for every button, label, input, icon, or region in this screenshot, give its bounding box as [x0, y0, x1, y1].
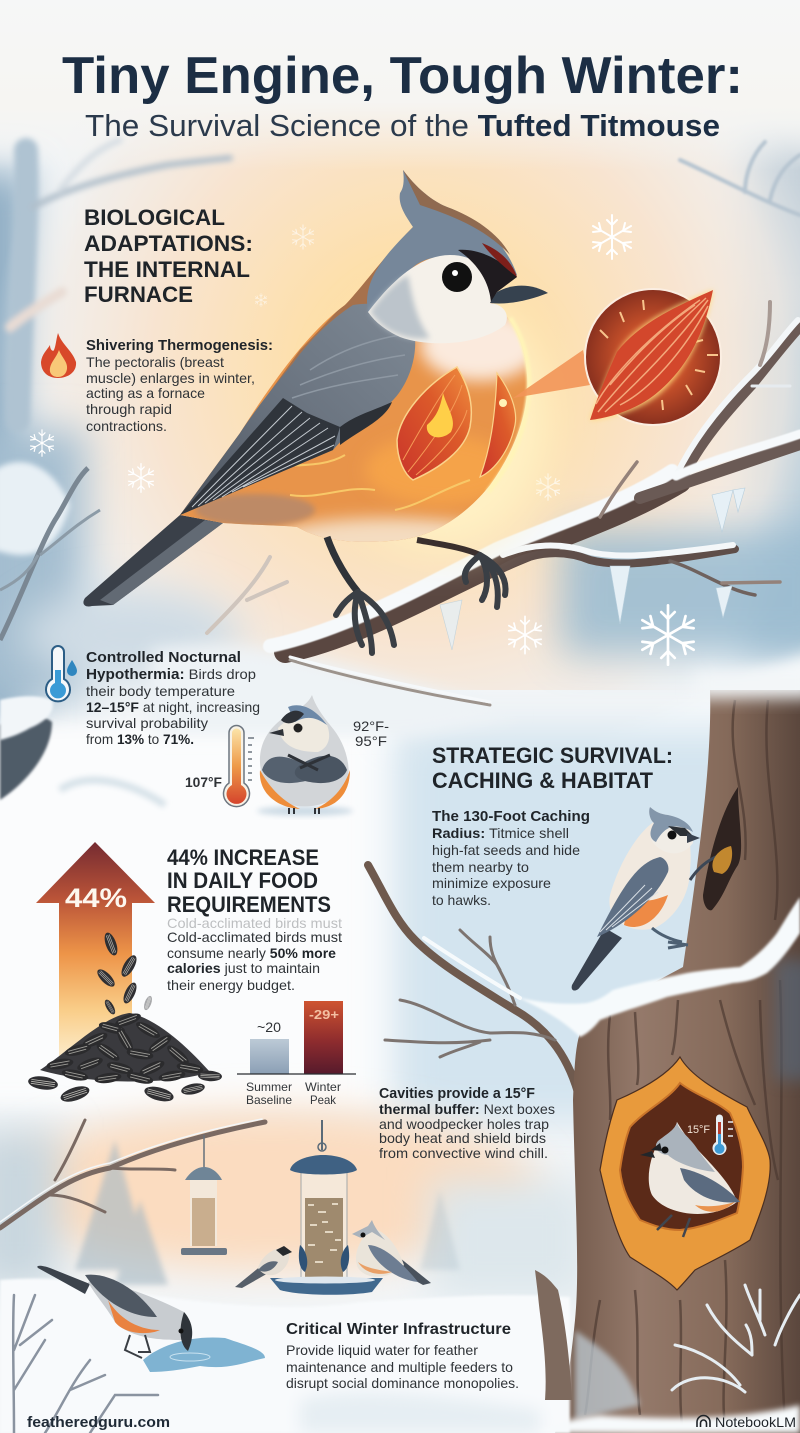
tail: [572, 928, 622, 991]
chest glow edge: [488, 318, 529, 492]
arm and seed: [690, 856, 718, 880]
heading: IN DAILY FOOD: [167, 868, 318, 893]
eye: [442, 262, 472, 292]
frost: [575, 1330, 640, 1420]
panel: biological adaptations heading: ADAPTATIONS:: [84, 231, 253, 256]
body copy: consume nearly 50% more: [167, 945, 336, 961]
body copy: their energy budget.: [167, 977, 295, 993]
snow ground: [0, 1278, 570, 1433]
hot spot: [499, 399, 507, 407]
chest muscle left: [397, 367, 471, 480]
bird glow: [330, 290, 550, 550]
head: [649, 807, 693, 853]
legs and feet: [327, 537, 358, 592]
text: shivering thermogenesis: [86, 338, 273, 434]
fluffed hypothermic bird: [257, 695, 353, 816]
text: shivering thermogenesis: contractions.: [86, 418, 167, 434]
text: critical winter infrastructure: maintenance and multiple feeders to: [286, 1359, 513, 1375]
text: controlled nocturnal hypothermia: [86, 650, 260, 747]
main branch with snow: [207, 302, 800, 705]
caching copy: minimize exposure: [432, 875, 551, 891]
muscle fibers: [590, 290, 713, 420]
icicles: [440, 488, 745, 650]
bar chart: Peak: [310, 1093, 337, 1107]
text: controlled nocturnal hypothermia: Hypothermia: Birds drop: [86, 666, 256, 683]
bar chart: -29+: [309, 1007, 339, 1022]
source url: featheredguru.com: [27, 1415, 170, 1431]
bar chart: [237, 1001, 356, 1107]
caching titmouse: [572, 807, 732, 991]
text: controlled nocturnal hypothermia: from 13% to 71%.: [86, 731, 194, 747]
text: shivering thermogenesis: Shivering Thermogenesis:: [86, 338, 273, 354]
black forehead band: [458, 250, 517, 303]
disc: [585, 289, 721, 425]
text: critical winter infrastructure: Provide liquid water for feather: [286, 1342, 478, 1358]
tree trunk: [517, 672, 800, 1433]
title: Tiny Engine, Tough Winter:: [62, 47, 743, 105]
caching copy: high-fat seeds and hide: [432, 842, 580, 858]
text: cavities thermal buffer: from convective wind chill.: [379, 1145, 548, 1161]
wing coverts: [180, 304, 415, 515]
body copy: Cold-acclimated birds must: [167, 929, 342, 945]
heading: [432, 743, 673, 793]
text: cavities thermal buffer: thermal buffer: Next boxes: [379, 1101, 555, 1117]
heading: STRATEGIC SURVIVAL:: [432, 743, 673, 768]
wing: [597, 857, 668, 937]
right feeder bird: [352, 1220, 431, 1285]
arrow label: 44%: [65, 883, 127, 913]
wing primaries: [180, 398, 340, 515]
text: critical winter infrastructure: [286, 1321, 519, 1391]
label: 92-95F: 95°F: [355, 733, 387, 749]
left feeder bird: [235, 1246, 292, 1288]
label: 92-95F: 92°F-: [353, 718, 389, 734]
snow behind branch: [150, 645, 520, 735]
text: cavities thermal buffer: and woodpecker holes trap: [379, 1116, 549, 1132]
top fade: [695, 672, 800, 698]
lower-right snow and grass: [540, 1285, 800, 1433]
caching copy: to hawks.: [432, 892, 491, 908]
text: cavities thermal buffer: Cavities provide a 15°F: [379, 1086, 535, 1102]
text: shivering thermogenesis: muscle) enlarges in winter,: [86, 370, 255, 386]
text: shivering thermogenesis: acting as a fornace: [86, 385, 205, 401]
text: controlled nocturnal hypothermia: their body temperature: [86, 683, 235, 699]
legs: [652, 928, 688, 948]
distant pines: [75, 1140, 460, 1285]
chest muscle right: [480, 373, 516, 477]
cavity bird: [640, 1122, 740, 1237]
notebooklm mark: NotebookLM: [715, 1414, 796, 1430]
lower-left snowy tree: [0, 462, 100, 640]
cavity thermometer: [712, 1114, 733, 1155]
small feeder: [181, 1135, 227, 1255]
tree branch: [368, 865, 580, 1100]
bottom-left branch: [0, 1119, 265, 1228]
caching copy: Radius: Titmice shell: [432, 825, 569, 841]
panel: biological adaptations heading: FURNACE: [84, 282, 193, 307]
panel: biological adaptations heading: THE INTERNAL: [84, 257, 250, 282]
tree cavity with bird: [600, 1057, 770, 1290]
muscle glow: [590, 290, 713, 420]
label: 107F: 107°F: [185, 774, 222, 790]
heading: REQUIREMENTS: [167, 892, 331, 917]
caching copy: The 130-Foot Caching: [432, 809, 590, 825]
panel: biological adaptations heading: [84, 205, 253, 307]
snowflakes: [31, 215, 694, 665]
upper-left misty tree: [10, 140, 230, 420]
snow ridge: [517, 897, 800, 1037]
heading: 44% INCREASE: [167, 845, 319, 870]
text: caching & habitat: [432, 743, 673, 908]
large feeder with two birds: [235, 1120, 431, 1295]
orange rim: [600, 1057, 770, 1290]
beak: [490, 286, 548, 303]
body: [180, 227, 528, 542]
heading: [167, 845, 331, 917]
text: cavities thermal buffer: body heat and shield birds: [379, 1130, 546, 1146]
icon: flame: [41, 333, 76, 378]
text: critical winter infrastructure: disrupt social dominance monopolies.: [286, 1375, 519, 1391]
caching copy: them nearby to: [432, 859, 529, 875]
label: 92-95F: [353, 718, 389, 749]
pond: [143, 1337, 265, 1372]
body: [609, 818, 691, 930]
text: cavities thermal buffer: [379, 1086, 555, 1161]
body copy: [167, 915, 342, 993]
subtitle: The Survival Science of the Tufted Titmouse: [85, 108, 720, 143]
inner hollow: [620, 1083, 743, 1230]
head cap and crest: [367, 170, 517, 312]
heading: CACHING & HABITAT: [432, 768, 654, 793]
main titmouse with glowing chest: [83, 170, 550, 653]
text: controlled nocturnal hypothermia: survival probability: [86, 715, 208, 731]
body copy: calories just to maintain: [167, 960, 320, 976]
icon: blue thermometer and droplet: [46, 646, 77, 701]
arrow: 44% increase: [36, 842, 155, 1065]
tail: [83, 515, 223, 607]
text: controlled nocturnal hypothermia: 12–15°F at night, increasing: [86, 699, 260, 715]
bar chart: Summer: [246, 1080, 292, 1094]
lower-left trunk: [0, 696, 165, 805]
text: shivering thermogenesis: The pectoralis (breast: [86, 354, 224, 370]
bar chart: Baseline: [246, 1093, 292, 1107]
text: critical winter infrastructure: Critical Winter Infrastructure: [286, 1321, 511, 1338]
foreground saplings: [13, 1295, 158, 1433]
panel: food requirements text: [167, 845, 342, 993]
text: controlled nocturnal hypothermia: Controlled Nocturnal: [86, 650, 241, 666]
stump: [535, 1270, 572, 1400]
beam: [513, 350, 590, 398]
panel: biological adaptations heading: BIOLOGICAL: [84, 205, 225, 230]
upper-right misty branches: [680, 142, 800, 215]
bar chart: Winter: [305, 1080, 341, 1094]
text: shivering thermogenesis: through rapid: [86, 401, 172, 417]
seed pile: [27, 931, 222, 1105]
15F label: 15°F: [687, 1124, 710, 1136]
face: [368, 255, 507, 343]
muscle callout: [513, 289, 721, 425]
caching copy: [432, 809, 590, 908]
drinking titmouse: [37, 1266, 192, 1358]
bar chart: ~20: [257, 1019, 281, 1035]
body copy: Cold-acclimated birds must: [167, 915, 342, 931]
upper tree hole: [703, 787, 741, 910]
hot thermometer: [224, 726, 254, 807]
